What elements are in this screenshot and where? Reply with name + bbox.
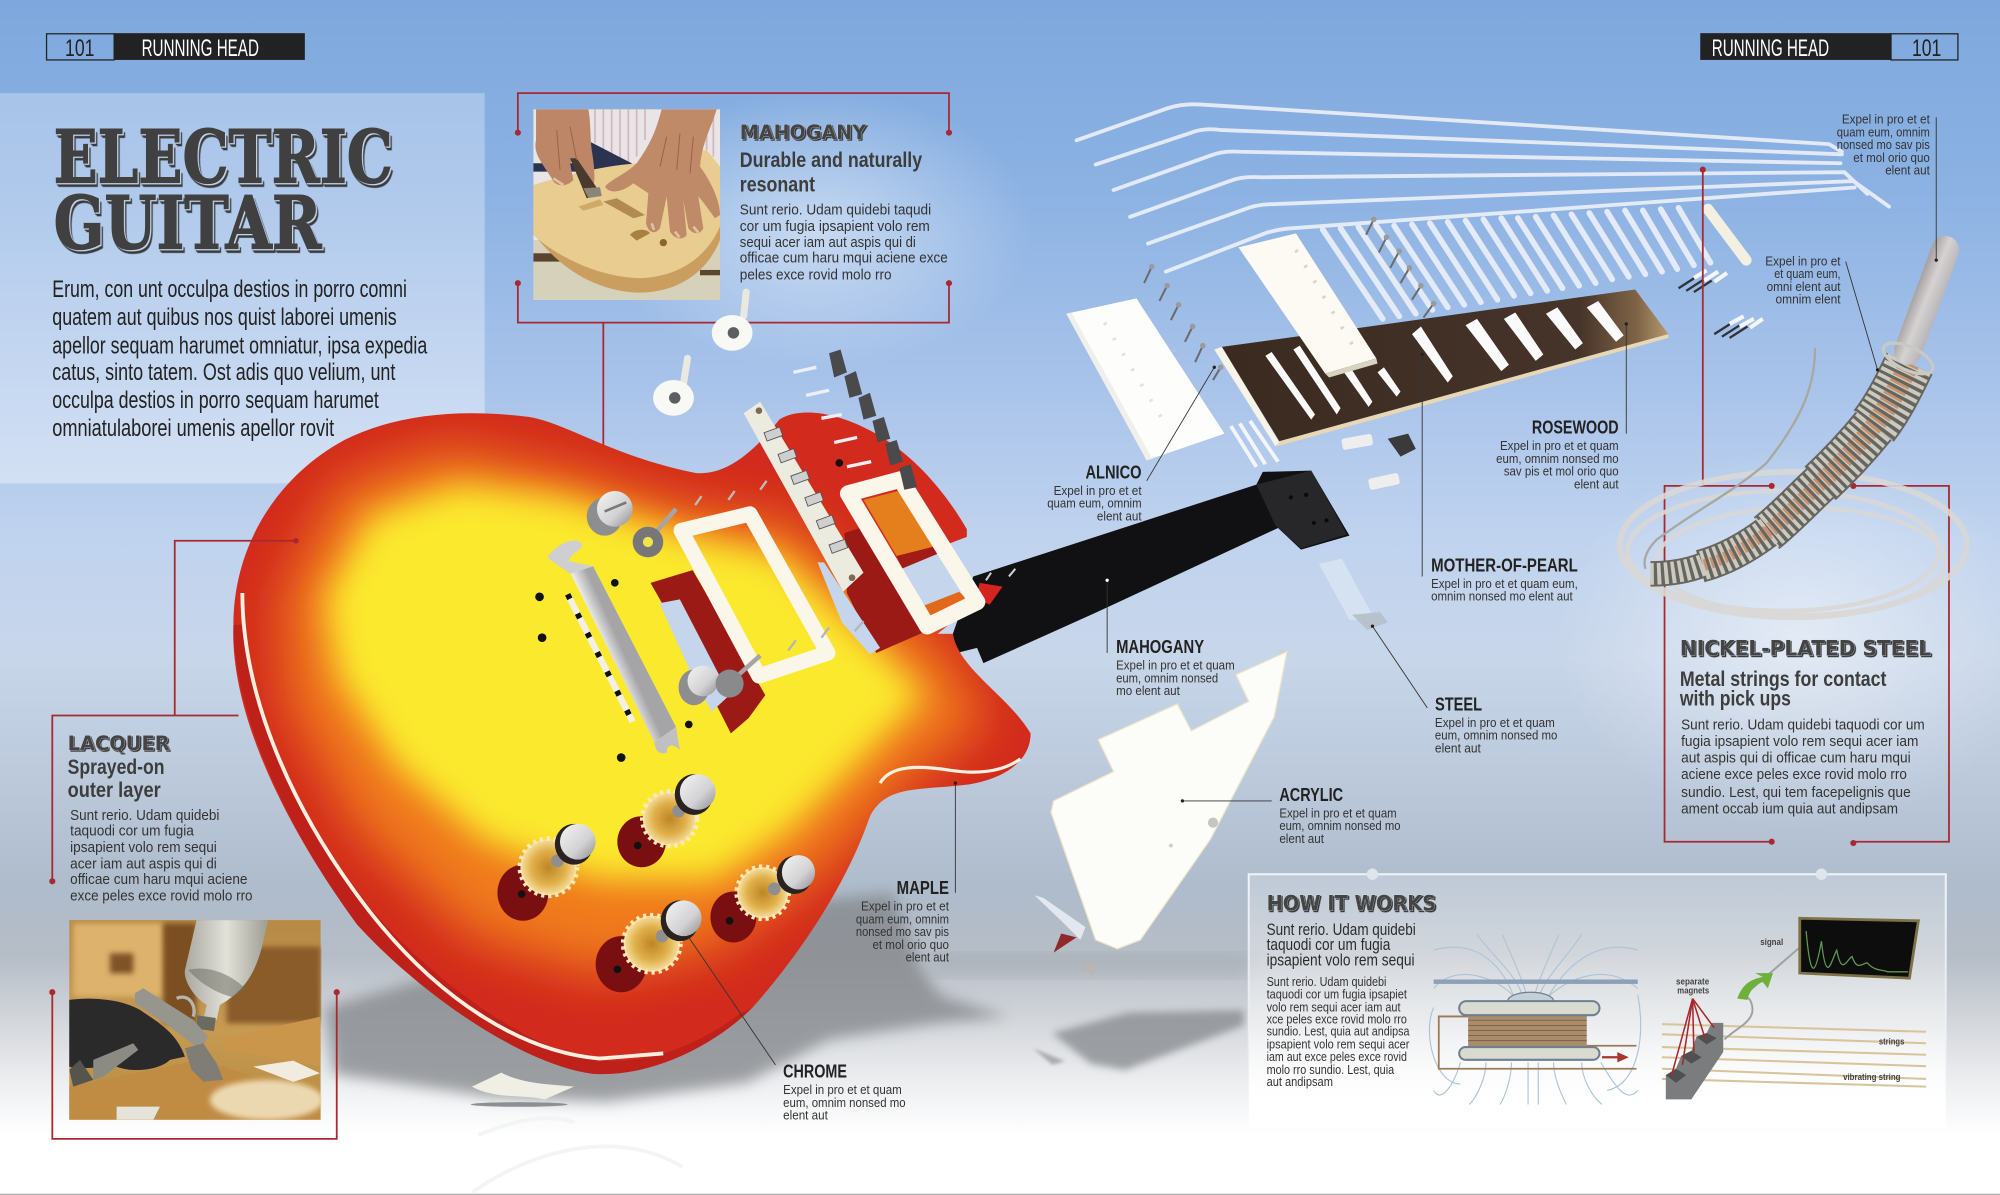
body text: taquodi cor um fugia ipsapiet xyxy=(1267,987,1407,1002)
subheading xyxy=(1679,668,1886,710)
label: top right rod: et mol orio quo xyxy=(1853,150,1930,165)
label: rosewood: eum, omnim nonsed mo xyxy=(1496,451,1619,466)
label: acrylic: elent aut xyxy=(1279,831,1324,846)
body text: fugia ipsapient volo rem sequi acer iam xyxy=(1681,733,1918,750)
label: mahogany neck: mo elent aut xyxy=(1116,683,1180,698)
bridge strip xyxy=(744,402,864,592)
running head left: RUNNING HEAD xyxy=(142,35,259,62)
body text: aut andipsam xyxy=(1267,1074,1333,1089)
tailpiece xyxy=(535,540,693,762)
truss rods xyxy=(1077,104,1889,272)
panel: mahogany xyxy=(514,92,1000,445)
string coil rings xyxy=(1620,472,1967,617)
knobs xyxy=(497,774,815,992)
body text: ipsapient volo rem sequi acer xyxy=(1267,1036,1410,1051)
intro text xyxy=(52,276,428,441)
label: mother-of-pearl: MOTHER-OF-PEARL xyxy=(1431,554,1578,575)
knob four xyxy=(596,900,702,992)
diagram labels: strings xyxy=(1879,1037,1904,1048)
body text xyxy=(1267,974,1410,1089)
intro text: occulpa destios in porro sequam harumet xyxy=(52,387,379,413)
white plate under guitar xyxy=(471,1073,574,1107)
tuners and screws xyxy=(695,349,917,505)
body text: peles exce rovid molo rro xyxy=(740,266,892,283)
body text: acer iam aut aspis qui di xyxy=(70,856,217,873)
pickguard xyxy=(1051,652,1287,949)
panel: nickel-plated steel text xyxy=(1679,637,1931,818)
subheading: with pick ups xyxy=(1679,687,1791,710)
diagram: strings and magnets xyxy=(1662,918,1926,1099)
pickup cover upper xyxy=(1239,233,1378,378)
label: winding: omnim elent xyxy=(1776,292,1841,307)
label: mother-of-pearl: Expel in pro et et quam eum, xyxy=(1431,576,1578,591)
running head left: 101 xyxy=(65,35,94,62)
panel: how it works xyxy=(1249,869,1946,1129)
fallen parts xyxy=(1034,895,1097,977)
subheading: Metal strings for contact xyxy=(1680,668,1886,691)
label: chrome: elent aut xyxy=(783,1108,828,1123)
label: rosewood: elent aut xyxy=(1574,476,1619,491)
body text: cor um fugia ipsapient volo rem xyxy=(740,218,930,235)
label: steel: elent aut xyxy=(1435,740,1481,755)
steel rod core xyxy=(1908,250,1945,351)
body text: sundio. Lest, quia aut andipsa xyxy=(1267,1024,1410,1039)
label: mahogany neck: eum, omnim nonsed xyxy=(1116,670,1218,685)
label: rosewood xyxy=(1496,322,1628,491)
label: winding: omni elent aut xyxy=(1767,279,1841,294)
background glow xyxy=(1556,446,2000,829)
inlays xyxy=(1265,301,1624,420)
label: chrome: CHROME xyxy=(783,1061,847,1082)
label: steel: STEEL xyxy=(1435,693,1482,714)
title xyxy=(54,115,393,267)
body text: aut aspis qui di officae cum haru mqui xyxy=(1681,750,1911,767)
intro text: Sunt rerio. Udam quidebi xyxy=(1267,920,1416,939)
pickup cavities xyxy=(651,490,969,733)
label: maple: et mol orio quo xyxy=(872,937,949,952)
label: maple: Expel in pro et et xyxy=(861,899,949,914)
body text: iam aut exce peles exce rovid xyxy=(1267,1049,1407,1064)
label: top right rod: nonsed mo sav pis xyxy=(1837,137,1930,152)
diagram labels: separate xyxy=(1676,977,1709,988)
knob one xyxy=(497,824,596,921)
body text xyxy=(740,201,948,283)
label: mahogany neck: Expel in pro et et quam xyxy=(1116,658,1235,673)
diagram labels: magnets xyxy=(1677,985,1709,996)
subheading xyxy=(740,149,922,196)
photo: spraying lacquer xyxy=(69,920,323,1120)
body text: Sunt rerio. Udam quidebi xyxy=(70,807,219,824)
body text: sundio. Lest, qui tem facepelignis que xyxy=(1681,784,1911,801)
label: winding: et quam eum, xyxy=(1774,266,1841,281)
body text: aciene exce peles exce rovid molo rro xyxy=(1681,766,1907,783)
label: maple: nonsed mo sav pis xyxy=(856,924,949,939)
intro text: ipsapient volo rem sequi xyxy=(1267,950,1415,969)
pickup frames xyxy=(681,480,977,676)
studs and washers xyxy=(587,491,760,705)
label: acrylic: Expel in pro et et quam xyxy=(1279,805,1397,820)
panel: lacquer xyxy=(49,538,340,1139)
intro text xyxy=(1267,920,1416,969)
label: top right rod: quam eum, omnim xyxy=(1837,124,1930,139)
label: maple: quam eum, omnim xyxy=(856,911,949,926)
ground shadows xyxy=(325,893,1250,1102)
diagram labels: signal xyxy=(1760,937,1783,948)
label: mother-of-pearl xyxy=(1421,353,1578,604)
body text xyxy=(1681,716,1925,818)
diagram: pickup magnetic field xyxy=(1429,935,1641,1104)
running head left xyxy=(47,33,305,62)
label: acrylic: ACRYLIC xyxy=(1279,784,1343,805)
label: alnico: elent aut xyxy=(1097,508,1142,523)
red bracket: nickel-plated steel xyxy=(1665,167,1949,846)
diagram labels: vibrating string xyxy=(1843,1072,1901,1083)
label: alnico: Expel in pro et et xyxy=(1054,483,1142,498)
diagram labels xyxy=(1676,937,1904,1083)
subheading: outer layer xyxy=(68,779,161,802)
label: mother-of-pearl: omnim nonsed mo elent aut xyxy=(1431,589,1573,604)
body text: officae cum haru mqui aciene exce xyxy=(740,250,948,267)
label: maple xyxy=(856,781,957,965)
running head right xyxy=(1700,33,1958,62)
label: chrome: eum, omnim nonsed mo xyxy=(783,1095,906,1110)
intro text: omniatulaborei umenis apellor rovit xyxy=(52,415,335,441)
label: steel: eum, omnim nonsed mo xyxy=(1435,728,1557,743)
label: maple: MAPLE xyxy=(897,877,949,898)
body text: ament occab ium quia aut andipsam xyxy=(1681,801,1898,818)
label: top right rod: Expel in pro et et xyxy=(1842,112,1930,127)
body text: sequi acer iam aut aspis qui di xyxy=(740,234,916,251)
guitar body xyxy=(233,413,1031,1074)
body text: Sunt rerio. Udam quidebi taquodi cor um xyxy=(1681,716,1925,733)
body text: officae cum haru mqui aciene xyxy=(70,871,247,888)
cavity one xyxy=(651,570,765,733)
heading: MAHOGANY xyxy=(740,121,867,144)
bare wire xyxy=(1645,348,1815,569)
label: chrome: Expel in pro et et quam xyxy=(783,1082,902,1097)
subheading: resonant xyxy=(740,173,815,196)
running head right: RUNNING HEAD xyxy=(1712,35,1829,62)
intro text: catus, sinto tatem. Ost adis quo velium, unt xyxy=(52,359,396,385)
label: alnico xyxy=(1047,366,1216,523)
label: steel: Expel in pro et et quam xyxy=(1435,715,1555,730)
body text: volo rem sequi acer iam aut xyxy=(1267,999,1401,1014)
strap buttons xyxy=(653,292,753,416)
body text xyxy=(70,807,253,904)
label: acrylic: eum, omnim nonsed mo xyxy=(1279,818,1401,833)
body text: taquodi cor um fugia xyxy=(70,822,194,839)
photo: hands shaping mahogany body xyxy=(533,109,720,300)
body text: ipsapient volo rem sequi xyxy=(70,839,217,856)
body text: Sunt rerio. Udam quidebi taqudi xyxy=(740,201,931,218)
binding xyxy=(242,593,663,1059)
body text: exce peles exce rovid molo rro xyxy=(70,887,253,904)
label: steel xyxy=(1371,625,1557,755)
subheading: Durable and naturally xyxy=(740,149,922,172)
label: alnico: ALNICO xyxy=(1085,461,1142,482)
frets xyxy=(1323,208,1746,319)
label: top right rod xyxy=(1837,112,1938,262)
label: winding xyxy=(1765,253,1879,372)
fretboard xyxy=(1214,290,1668,446)
faint floor reflection xyxy=(472,1118,682,1192)
label: rosewood: sav pis et mol orio quo xyxy=(1504,464,1619,479)
intro text: taquodi cor um fugia xyxy=(1267,935,1391,954)
label: chrome xyxy=(689,937,906,1123)
wound string xyxy=(1651,250,1945,574)
body text: molo rro sundio. Lest, quia xyxy=(1267,1062,1395,1077)
small hardware xyxy=(1231,270,1763,659)
pickup cover lower xyxy=(1066,298,1224,460)
body text: xce peles exce rovid molo rro xyxy=(1267,1011,1407,1026)
heading: NICKEL-PLATED STEEL xyxy=(1680,637,1931,662)
label: winding: Expel in pro et xyxy=(1765,253,1841,268)
small frame screws xyxy=(788,621,864,650)
label: top right rod: elent aut xyxy=(1885,163,1930,178)
label: rosewood: Expel in pro et et quam xyxy=(1500,438,1619,453)
knob three xyxy=(710,855,815,942)
label: mahogany neck: MAHOGANY xyxy=(1116,636,1205,657)
intro panel xyxy=(0,93,485,483)
intro text: Erum, con unt occulpa destios in porro comni xyxy=(52,276,407,302)
label: alnico: quam eum, omnim xyxy=(1047,496,1142,511)
heading: LACQUER xyxy=(68,732,170,755)
title: GUITAR xyxy=(54,182,322,267)
subheading xyxy=(68,756,165,802)
intro text: quatem aut quibus nos quist laborei umenis xyxy=(52,304,397,330)
label: rosewood: ROSEWOOD xyxy=(1532,417,1619,438)
cavity two xyxy=(818,490,969,654)
title: ELECTRIC xyxy=(54,115,393,200)
body text: Sunt rerio. Udam quidebi xyxy=(1267,974,1387,989)
label: acrylic xyxy=(1181,784,1401,846)
neck xyxy=(953,471,1349,663)
subheading: Sprayed-on xyxy=(68,756,165,779)
running head right: 101 xyxy=(1912,35,1941,62)
intro text: apellor sequam harumet omniatur, ipsa expedia xyxy=(52,332,428,358)
heading: HOW IT WORKS xyxy=(1267,892,1436,917)
label: mahogany neck xyxy=(1105,579,1235,698)
screws xyxy=(1144,217,1436,380)
knob two xyxy=(617,774,716,867)
page edge xyxy=(0,1194,2000,1195)
label: maple: elent aut xyxy=(906,950,949,965)
